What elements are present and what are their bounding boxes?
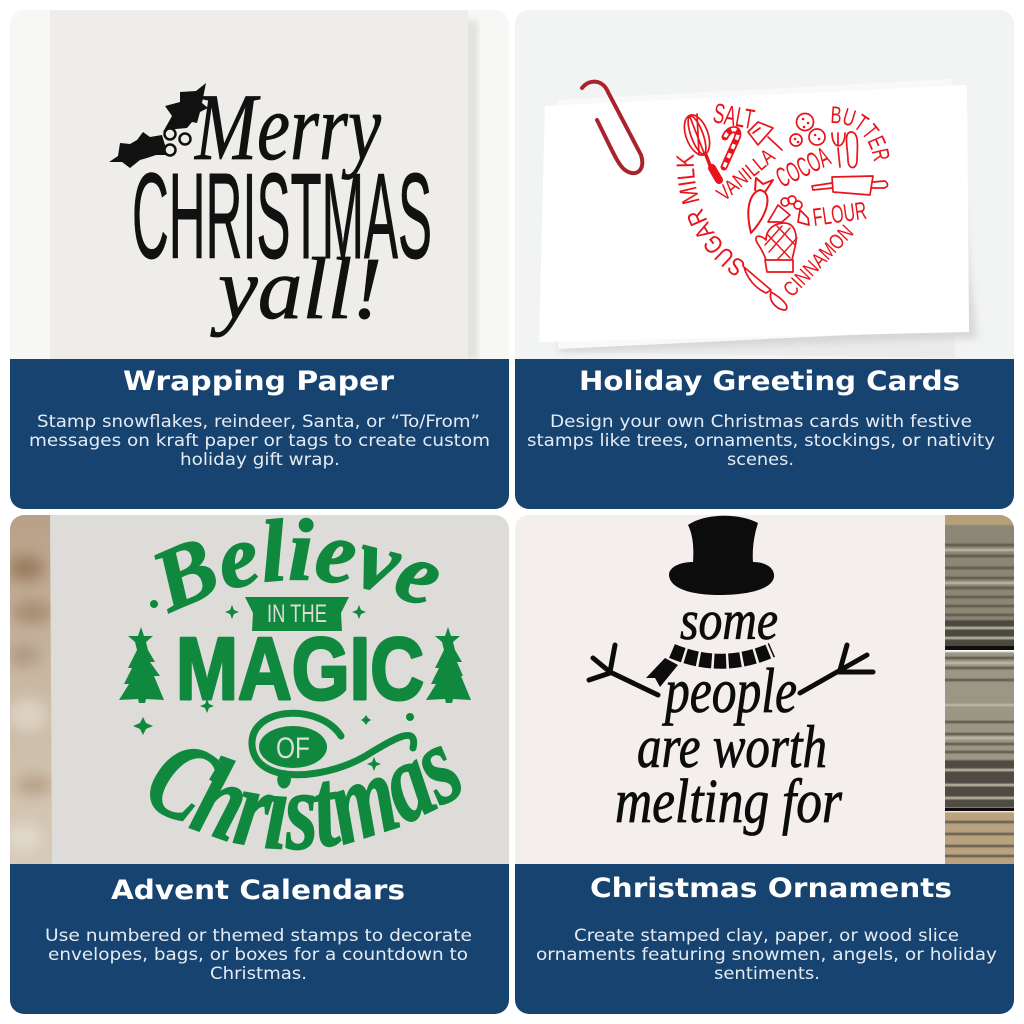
oval: of [252,713,414,775]
heart words: BUTTER [832,106,890,162]
description: Design your own Christmas cards with festive [550,412,972,431]
stamp: snowman [589,516,873,836]
description: ornaments featuring snowmen, angels, or holiday [536,945,997,964]
description [536,926,997,983]
script: Christmas: Christmas [150,746,461,850]
stamp: Believe in the Magic of Christmas [119,518,471,850]
paper edge [515,515,945,865]
heading: Holiday Greeting Cards [579,366,960,397]
heart words: COCOA [771,141,835,193]
caption band [10,864,509,1014]
sheet of paper [50,515,509,865]
photo background [10,10,509,360]
word: MAGIC: MAGIC [176,619,424,718]
description: scenes. [727,450,794,469]
description [528,414,994,465]
description [29,412,490,469]
heading: Advent Calendars [111,875,405,906]
heart words: VANILLA [712,145,779,206]
script lines: some [680,590,778,652]
description: messages on kraft paper or tags to create custom [29,431,490,450]
icon: holly [768,196,809,225]
stamp: Merry Christmas yall: yall! [210,241,382,338]
description: holiday gift wrap. [180,450,340,469]
description: Create stamped clay, paper, or wood slice [574,926,959,945]
description: Christmas. [210,964,307,983]
stamp: Merry Christmas yall [132,74,432,338]
description [45,926,472,983]
icon: top hat [669,516,774,595]
description: stamps like trees, ornaments, stockings, or nativity [527,431,995,450]
panel: wrapping paper: CHRISTMAS [132,148,432,284]
caption band [515,359,1014,509]
description: Stamp snowflakes, reindeer, Santa, or “To/From” [37,412,480,431]
description: sentiments. [714,964,820,983]
script lines: are worth [637,714,827,780]
paper shadow [468,18,480,359]
heart words: CINNAMON [779,221,858,301]
script lines [615,590,843,836]
heading: Christmas Ornaments [590,873,952,904]
icon: holly [109,83,208,168]
icon: rolling pin [812,176,888,195]
panel: christmas ornaments [515,510,1020,1014]
wood planks [940,510,1020,868]
stamp: baking heart [679,112,888,310]
photo background [515,10,1014,360]
caption band [515,864,1014,1014]
banner: in the: IN THE [267,600,327,628]
sheet of paper [515,515,946,865]
icon: right tree [426,627,471,703]
icon: left arm [589,645,658,695]
banner: in the [245,597,349,631]
panel: advent calendars [10,515,509,1014]
icon: left tree [119,627,164,703]
icon: oven mitt [756,223,796,272]
heart words: SUGAR MILK [676,154,744,276]
stamp: Merry Christmas yall: Merry [193,74,382,180]
icon: sparkles [133,600,414,771]
oval: of: OF [276,732,310,765]
blurred wood background [10,515,52,864]
icon: fork and spoon [832,132,857,168]
icon: spatula [744,267,787,310]
heart words: SALT [711,97,757,135]
icon: whisk [679,112,719,180]
script lines: people [662,655,797,726]
icon: paper clip [582,82,642,173]
panel: holiday greeting cards [515,10,1014,509]
card stack [539,79,977,358]
script lines: melting for [615,768,843,836]
icon: cookies [790,114,825,146]
description: envelopes, bags, or boxes for a countdown to [48,945,468,964]
icon: candy cane [724,130,738,167]
description: Use numbered or themed stamps to decorate [45,926,472,945]
sheet of paper [50,10,468,360]
script: Believe: Believe [154,518,439,614]
caption band [10,359,509,509]
icon: mixer [748,122,782,150]
heart words [676,104,890,296]
icon: right arm [800,645,873,693]
icon: piping bag [748,178,773,233]
panel: wrapping paper [10,10,509,509]
heart words: FLOUR [811,197,868,232]
heading: Wrapping Paper [123,366,395,397]
scarf [646,650,772,687]
